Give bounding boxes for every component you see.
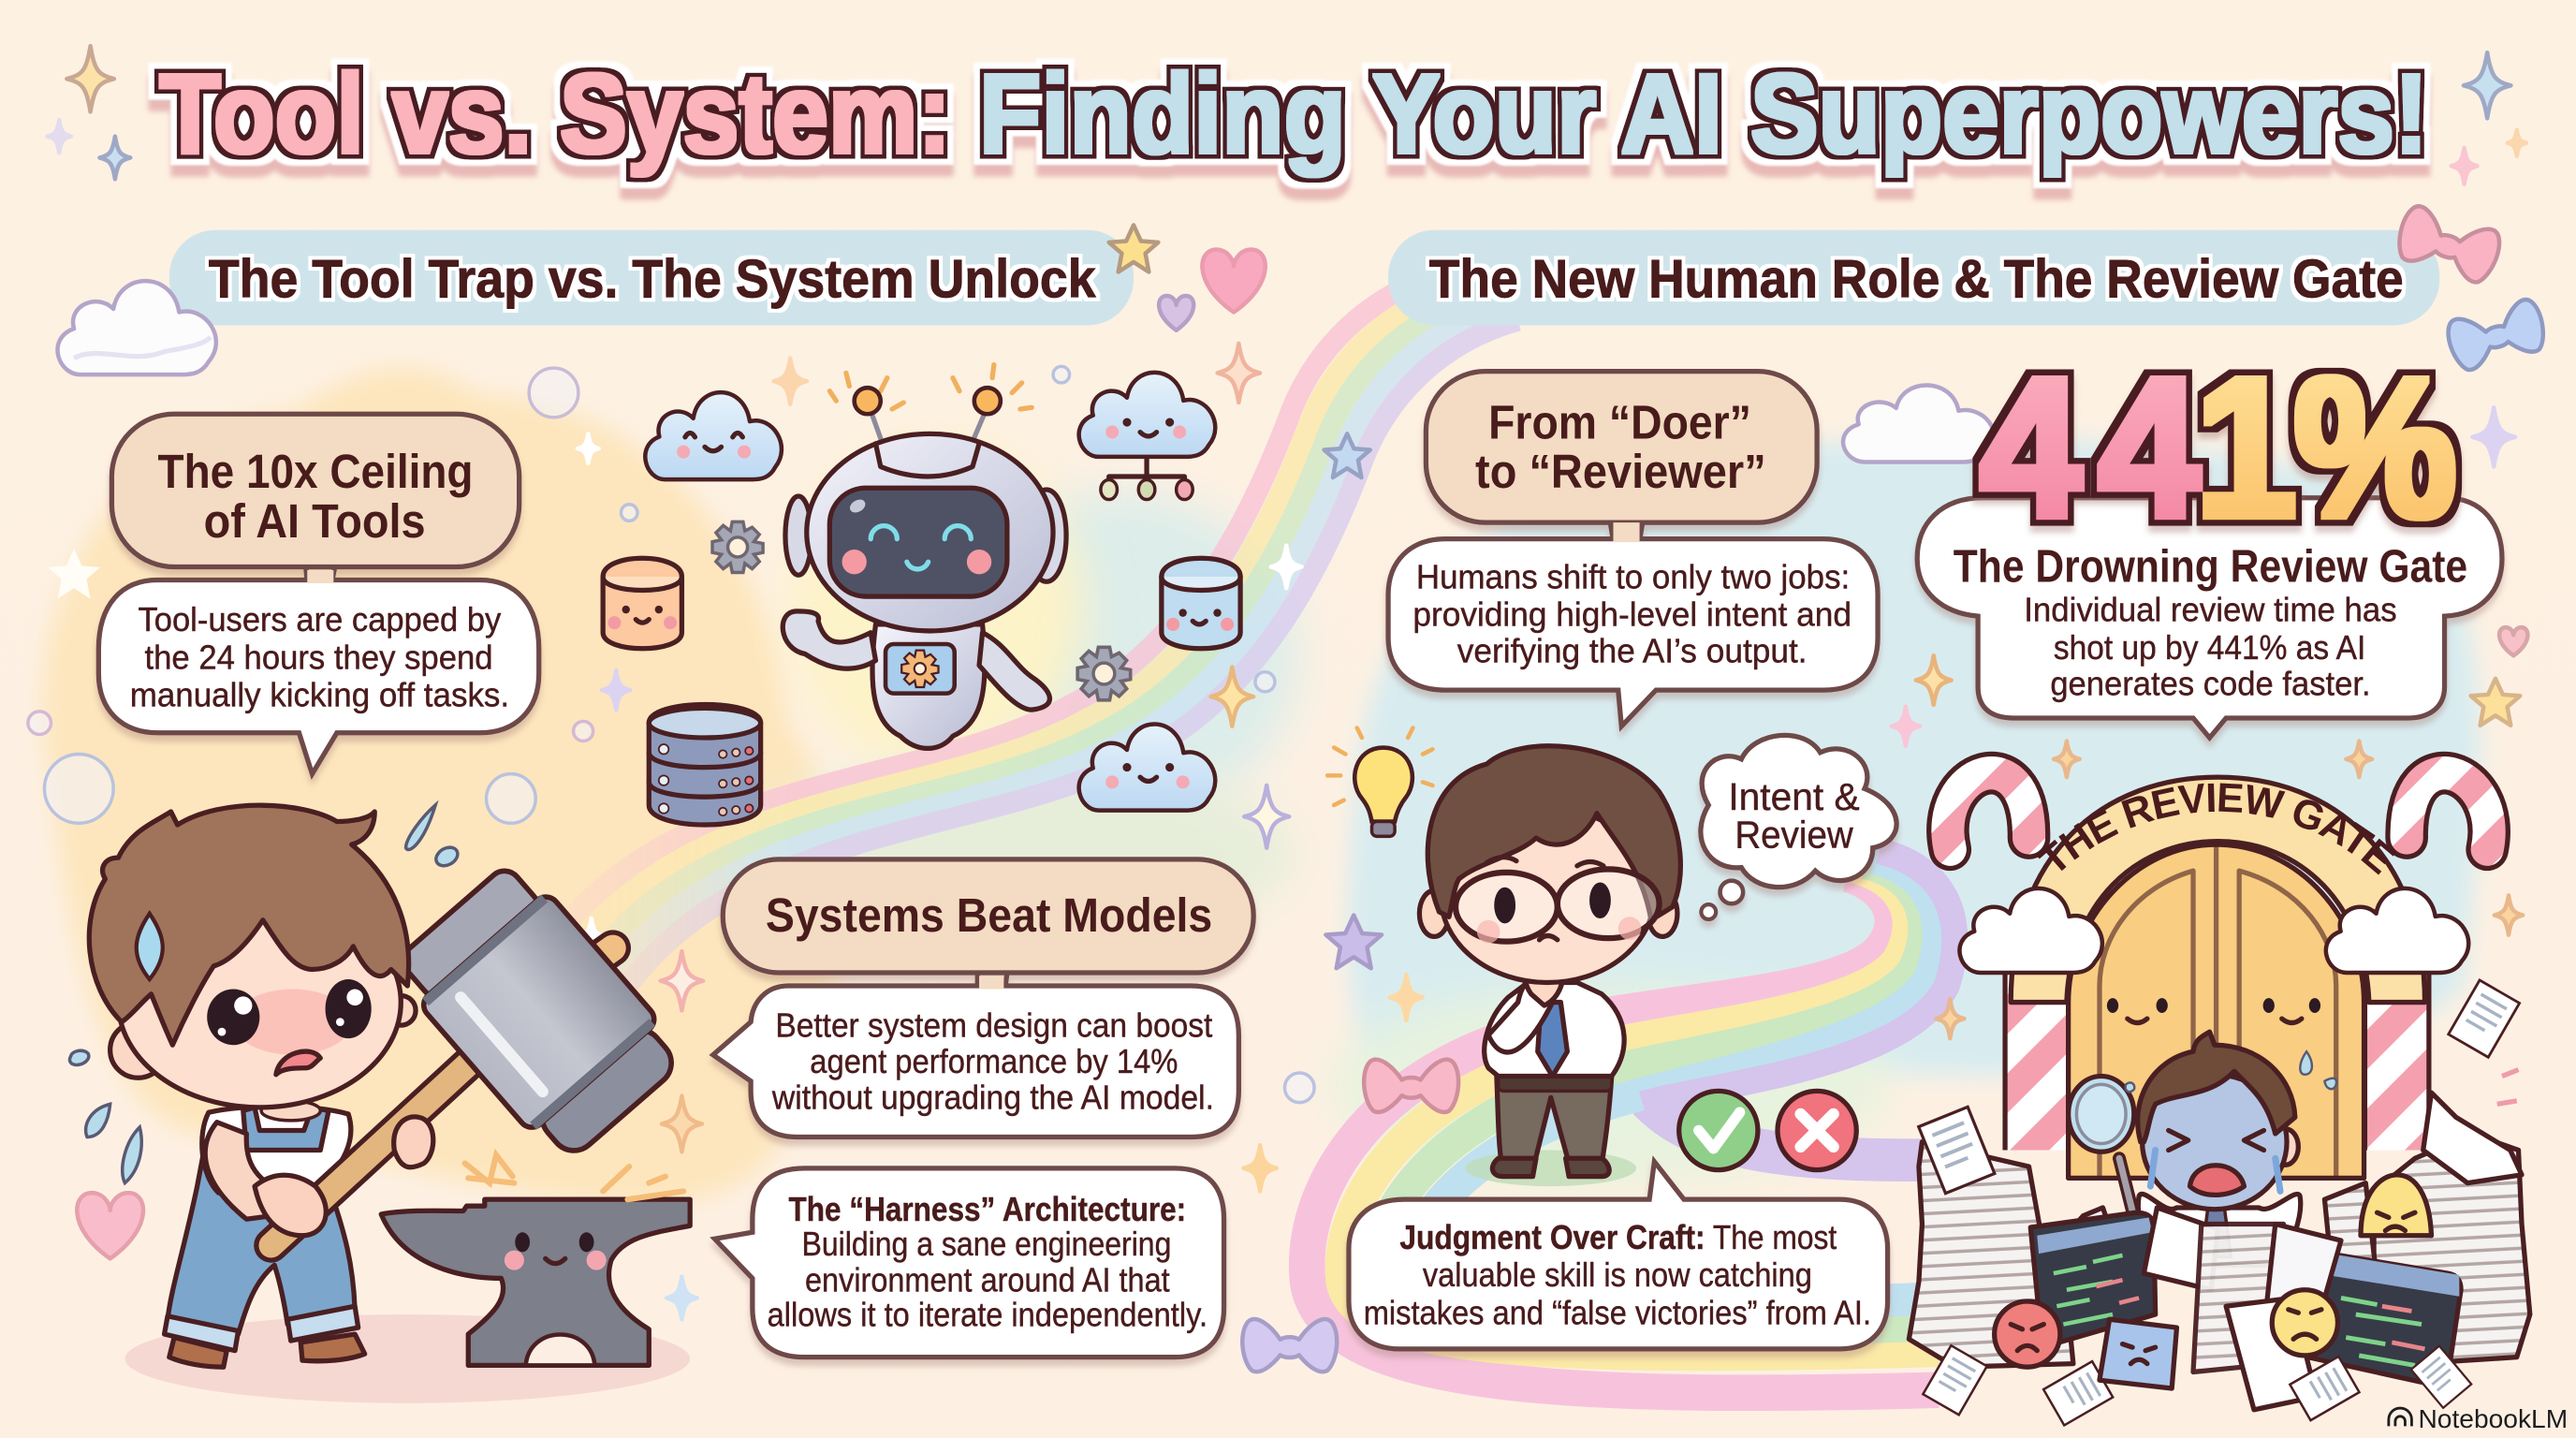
- header pill: left section: [169, 230, 1134, 325]
- body text: agent performance by 14%: [810, 1042, 1178, 1080]
- body text: Better system design can boost: [775, 1005, 1212, 1044]
- crying person: [2138, 1032, 2301, 1265]
- body text: [768, 1190, 1208, 1333]
- rainbow: upper left to right header: [550, 272, 1518, 992]
- plain cloud: near 441: [1843, 385, 1994, 462]
- callout: drowning review gate: [1917, 498, 2502, 738]
- code screen right: [2308, 1252, 2461, 1386]
- boy head: [89, 805, 416, 1108]
- title: Tool vs. System:: [159, 50, 951, 177]
- background blobs: [42, 368, 2481, 1205]
- panel: harness architecture: [714, 1168, 1224, 1357]
- bubbles: [28, 366, 1314, 1103]
- big number 441%: [1980, 337, 2457, 559]
- panel: from doer to reviewer: [1388, 372, 1878, 726]
- body text: without upgrading the AI model.: [771, 1078, 1214, 1117]
- heading: The 10x Ceiling: [158, 445, 474, 498]
- body text: generates code faster.: [2050, 664, 2371, 702]
- thought text: [1728, 775, 1860, 857]
- cloud face with network: [1079, 373, 1215, 500]
- rainbow road: right path: [1307, 851, 1954, 1393]
- boy with hammer: ground shadow: [124, 1314, 690, 1403]
- plain cloud: top left: [58, 281, 216, 374]
- loose papers: [1919, 980, 2520, 1425]
- heading: From “Doer”: [1488, 396, 1751, 449]
- cylinder: orange: [603, 558, 681, 649]
- boy with hammer: [165, 1101, 365, 1367]
- body text: Tool-users are capped by: [138, 600, 501, 638]
- sweat drops: [69, 805, 458, 1183]
- body text: providing high-level intent and: [1412, 595, 1852, 634]
- body text: [2024, 590, 2397, 702]
- small drops and marks near gate: [2126, 1051, 2519, 1104]
- review gate: [1926, 751, 2510, 1181]
- candy canes: [1948, 773, 2489, 1151]
- heading line two: to “Reviewer”: [1475, 445, 1766, 498]
- paper stack: right: [2324, 1093, 2530, 1364]
- thought text: Review: [1734, 814, 1854, 857]
- gears: [712, 521, 1131, 700]
- panel: 10x ceiling: [98, 414, 539, 774]
- body text: valuable skill is now catching: [1423, 1255, 1812, 1294]
- icon: check and cross: [1679, 1091, 1856, 1170]
- body text: Building a sane engineering: [802, 1225, 1171, 1263]
- cylinder: blue: [1162, 558, 1240, 649]
- gate clouds: [1959, 888, 2102, 973]
- code screen left: [2030, 1212, 2156, 1344]
- NotebookLM mark: NotebookLM: [2418, 1404, 2568, 1433]
- heading: Systems Beat Models: [766, 888, 1212, 942]
- heading: The Drowning Review Gate: [1954, 541, 2467, 592]
- angry emojis: [1995, 1175, 2431, 1388]
- hammer: [271, 856, 691, 1245]
- cloud face: left: [645, 392, 782, 479]
- panel: systems beat models: [713, 859, 1253, 1137]
- body text: [1364, 1218, 1871, 1332]
- body text: Individual review time has: [2024, 590, 2397, 628]
- body text: verifying the AI’s output.: [1457, 631, 1808, 669]
- body text: [771, 1005, 1214, 1117]
- cloud face: lower: [1079, 725, 1215, 811]
- body text: shot up by 441% as AI: [2054, 628, 2365, 667]
- title: Finding Your AI Superpowers!: [979, 50, 2428, 177]
- big number 441%: 1%: [2195, 337, 2457, 559]
- door faces: [2107, 998, 2320, 1023]
- body text: [1412, 557, 1852, 669]
- body text: Judgment Over Craft: The most: [1399, 1218, 1837, 1256]
- stars, hearts and bows: [48, 203, 2549, 1372]
- body text: The “Harness” Architecture:: [788, 1190, 1186, 1228]
- boy hands on handle: [255, 1117, 433, 1236]
- magnifying glass: [2069, 1077, 2136, 1224]
- robot: [783, 365, 1066, 748]
- body text: Humans shift to only two jobs:: [1416, 557, 1850, 595]
- thought bubble: [1701, 735, 1896, 919]
- paper stack: left: [1909, 1142, 2123, 1367]
- body text: mistakes and “false victories” from AI.: [1364, 1294, 1871, 1332]
- arch label: THE REVIEW GATE: [2038, 783, 2394, 874]
- header pill: right section: The New Human Role & The Review Gate: [1429, 250, 2404, 310]
- body text: allows it to iterate independently.: [768, 1295, 1208, 1333]
- panel: judgment over craft: [1349, 1162, 1888, 1349]
- thought text: Intent &: [1728, 775, 1860, 818]
- icon: light bulb: [1327, 727, 1432, 836]
- anvil: [381, 1155, 690, 1365]
- arch: [2011, 777, 2424, 1003]
- door: [2069, 844, 2364, 1178]
- header pill: right section: [1388, 230, 2439, 325]
- body text: [130, 600, 509, 714]
- database stack: [649, 704, 761, 825]
- body text: manually kicking off tasks.: [130, 676, 509, 714]
- header pill: left section: The Tool Trap vs. The System Unlock: [209, 250, 1096, 310]
- body text: environment around AI that: [805, 1260, 1170, 1299]
- body text: the 24 hours they spend: [145, 638, 493, 676]
- big number 441%: 44: [1980, 337, 2201, 559]
- title: [159, 50, 2428, 177]
- heading line two: of AI Tools: [204, 494, 426, 548]
- man reviewer: [1419, 746, 1680, 1186]
